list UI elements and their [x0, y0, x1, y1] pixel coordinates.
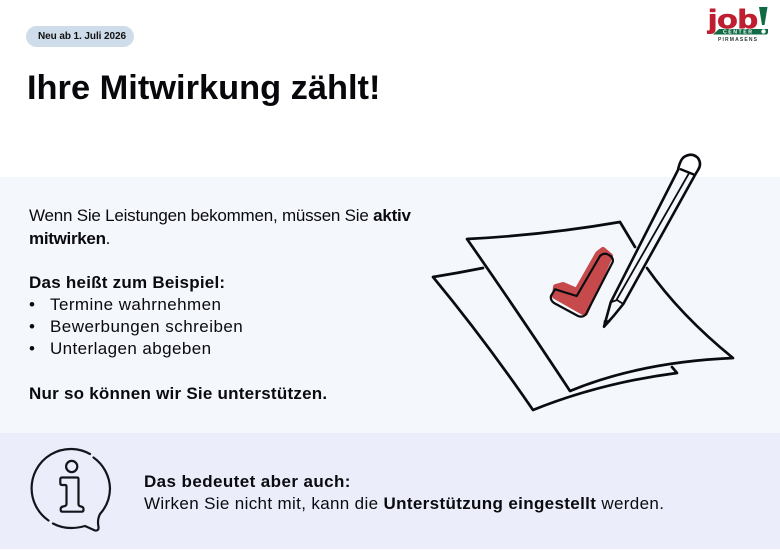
text block: examples list: •: [29, 317, 35, 336]
badge: date: [26, 26, 134, 47]
badge: date: Neu ab 1. Juli 2026: [38, 31, 126, 42]
checkmark outline: [551, 254, 613, 317]
text block: closing statement: Nur so können wir Sie unterstützen.: [29, 384, 327, 403]
text block: examples list: Das heißt zum Beispiel:: [29, 273, 225, 292]
panel: main content background: [0, 177, 780, 433]
text block: notice: Das bedeutet aber auch:: [144, 472, 351, 491]
text block: intro: Wenn Sie Leistungen bekommen, müssen Sie aktiv: [29, 206, 411, 225]
front sheet: [467, 222, 733, 391]
text block: intro: mitwirken.: [29, 229, 110, 248]
panel: notice background: [0, 433, 780, 549]
back sheet: [433, 268, 677, 410]
logo: jobcenter Pirmasens: job: [707, 4, 758, 34]
logo: jobcenter Pirmasens: CENTER: [723, 30, 752, 36]
text block: examples list: Unterlagen abgeben: [50, 339, 211, 358]
title: Ihre Mitwirkung zählt!: [27, 69, 380, 107]
text block: examples list: [29, 273, 243, 358]
icon: information speech bubble: [32, 449, 110, 531]
pencil: [604, 155, 700, 327]
logo: jobcenter Pirmasens: PIRMASENS: [718, 37, 758, 43]
text block: examples list: •: [29, 295, 35, 314]
logo: jobcenter Pirmasens: [707, 4, 768, 43]
text block: examples list: Bewerbungen schreiben: [50, 317, 243, 336]
text block: examples list: Termine wahrnehmen: [50, 295, 221, 314]
text block: intro: [29, 206, 411, 248]
icon: documents with checkmark and pencil: [433, 155, 733, 410]
text block: notice: Wirken Sie nicht mit, kann die Unterstützung eingestellt werden.: [144, 494, 664, 513]
text block: notice: [144, 472, 664, 513]
red checkmark: [555, 250, 610, 313]
text block: examples list: •: [29, 339, 35, 358]
